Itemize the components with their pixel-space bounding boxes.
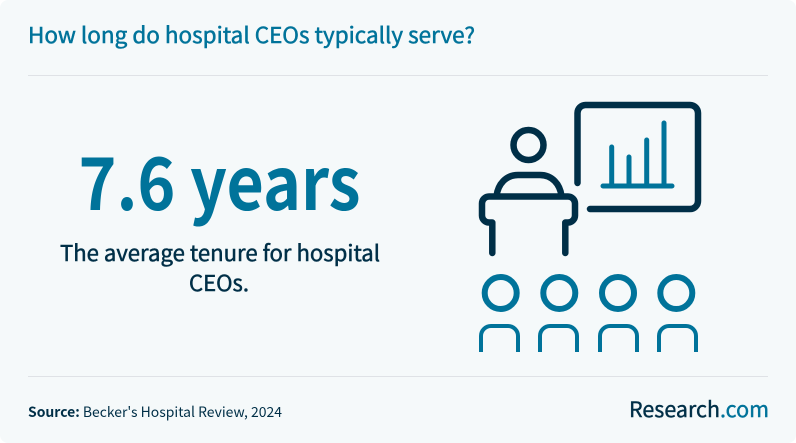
description text: The average tenure for hospital [60,236,380,268]
description text [60,236,380,298]
big statistic: 7.6 years [78,126,360,232]
logo: Research.com: Research.com [629,394,769,424]
description text: CEOs. [189,266,249,298]
icon: bar chart [603,123,672,186]
icon: podium [482,196,575,253]
icon: presenter head [514,130,544,160]
icon: presenter body [496,175,562,196]
title: How long do hospital CEOs typically serve? [28,18,475,50]
icon: audience heads [485,277,692,309]
icon: presenter at podium with chart and audience [481,105,698,352]
icon: audience shoulders [481,326,696,352]
icon: presentation board [578,105,698,209]
source note: Source: Becker's Hospital Review, 2024 [28,402,282,422]
